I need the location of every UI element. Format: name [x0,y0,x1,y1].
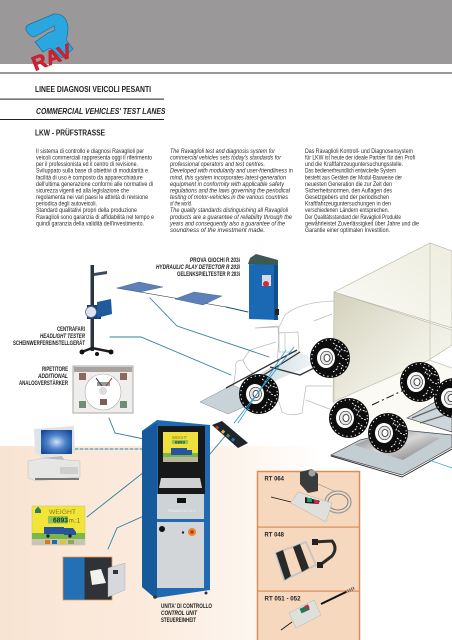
text block: italian: sicurezza vigenti ed alla legislazione che [36,188,130,194]
text block: italian: quindi garanzia della validità dell'investimento. [36,220,144,227]
text block: italian: Standard qualitativi propri della produzione [36,207,138,214]
header band [0,0,452,74]
text block: german: Gesetzgebers und der periodischen [305,194,389,201]
text block: english: regulations and the laws governing the periodical [170,188,291,194]
icon: pc monitor and desktop [28,426,80,481]
text block: german: besteht aus Geräten der Modul-Bauweise der [305,174,402,181]
text block: english: years and consequently also a guarantee of the [169,220,286,227]
icon: analog repeater [73,366,133,413]
text block: german: und die Kraftfahrzeuguntersuchungsstelle. [305,161,403,168]
truck box side [333,292,452,402]
text block: english: The Ravaglioli test and diagnosis system for [170,148,276,155]
label: control unit [161,603,212,624]
logo [26,14,76,76]
front plate [200,385,264,414]
title: english: COMMERCIAL VEHICLES' TEST LANES [36,106,166,116]
text block: italian: periodica degli autoveicoli. [36,201,97,208]
text block: italian: regolamenta nei vari paesi le attività di revisione [36,194,149,201]
tyre rear back [400,362,440,402]
icon: play detector control unit [248,254,279,320]
text block: italian: Sviluppato sulla base di obiettivi di modularità e [36,168,149,175]
icon: control cabinet: RAVAGLIOLI [168,508,195,513]
tyre front left [239,374,279,414]
icon: play detector plates [117,282,222,305]
text block: italian: per il professionista ed il centro di revisione. [36,161,138,168]
icon: control cabinet: WEIGHT [172,435,187,440]
text block: english [169,148,294,234]
icon: RT 048 device [276,539,335,580]
label: RT 064: RT 064 [264,476,284,482]
plate under cab [243,351,318,384]
text block: german: Sicherheitsnormen, den Auflagen des [305,188,392,194]
text block: english: soundness of the investment made. [170,227,265,234]
truck box roof [334,243,452,328]
text block: english: of the world. [170,201,192,208]
rear ramp rollers [354,428,440,460]
text block: german: Der Qualitätsstandard der Ravaglioli Produkte [305,214,401,221]
text block: english: commercial vehicles sets today's standards for [170,155,282,162]
peach background panel [0,446,320,640]
text block: italian: dell'ultima generazione conformi alle normative di [36,181,153,188]
label: play detector: HYDRAULIC PLAY DETECTOR R 203i [156,264,240,271]
label: repeater: ANALOGVERSTÄRKER [19,379,68,387]
label: repeater: ADDITIONAL [37,373,68,380]
icon: remote control [212,421,248,448]
connection lines [75,288,452,549]
text block: german: für LKW ist heute der ideale Partner für den Profi [305,155,415,162]
tyre rear far [434,378,452,418]
rear ramp plate [331,430,452,475]
text block: german: neuesten Generation die zur Zeit den [305,181,392,188]
tyre rear left [329,398,369,438]
dashed rear axle [372,389,406,405]
text block: italian: veicoli commerciali rappresenta oggi il riferimento [36,155,153,162]
text block: english: products are a guarantee of reliability through the [169,214,293,221]
label: play detector: GELENKSPIELTESTER R 203i [177,271,240,278]
label: control unit: UNITA' DI CONTROLLO [161,603,212,610]
text block: german: Das bedienerfreundlich entwickelte System [305,168,396,175]
text block: german: Kraftfahrzeuguntersuchungen in den [305,201,391,208]
icon: RT 064 device [271,469,351,522]
text block: italian: facilità di uso è composto da apparecchiature [36,174,143,181]
truck box edges [333,243,452,404]
tyre front right [310,338,350,378]
label: RT 048: RT 048 [264,532,284,538]
text block: italian: Ravaglioli sono garanzia di affidabilità nel tempo e [36,214,155,221]
axle lines [226,350,318,390]
text block: german: gewährleistet Zuverlässigkeit über Jahre und die [305,220,420,227]
text block: italian: Il sistema di controllo e diagnosi Ravaglioli per [36,148,144,155]
icon: weight screen: m.:1 [69,518,81,524]
tyre rear middle [368,413,408,453]
text block: italian [36,148,155,227]
logo: RAV [29,40,76,76]
icon: weight screen: 6893 [53,518,68,524]
icon: control cabinet [142,420,210,599]
truck cab outline [233,301,334,415]
text block: english: professional operators and test centres. [169,161,265,168]
truck illustration [200,243,452,477]
label: control unit: STEUEREINHEIT [161,617,196,624]
label: repeater: RIPETITORE [42,366,68,373]
truck box lower cutaway [333,360,452,430]
label: headlight tester: CENTRAFARI [57,326,85,333]
icon: weight screen [32,506,85,545]
icon: drawer [63,557,125,600]
title: italian: LINEE DIAGNOSI VEICOLI PESANTI [35,84,151,94]
rear plate right [407,402,452,432]
label: repeater [19,366,68,387]
text block: german: verschiedenen Ländern entsprechen. [305,207,389,214]
text block: english: Developed with modularity and user-friendliness in [170,168,294,175]
text block: english: testing of motor-vehicles in the various countries [170,194,288,201]
icon: RT 051-052 device [281,588,354,630]
label: RT 051-052: RT 051 - 052 [264,596,301,602]
text block: german: Garantie einer optimalen Investition. [305,227,390,234]
label: play detector: PROVA GIOCHI R 203i [190,257,240,264]
label: control unit: CONTROL UNIT [161,610,198,617]
panel: RT accessories [257,469,360,640]
text block: german: Das Ravaglioli Kontroll- und Diagnosensystem [305,148,413,155]
text block: english: mind, this system incorporates latest-generation [170,174,287,181]
title: german: LKW - PRÜFSTRASSE [35,128,105,138]
label: headlight tester: HEADLIGHT TESTER [40,333,85,340]
text block: english: The quality standards distinguishing all Ravaglioli [170,207,289,214]
rear ramp plate edge [331,449,452,477]
icon: headlight tester [80,265,114,356]
text block: english: equipment in conformity with applicable safety [170,181,285,188]
label: play detector [156,257,240,278]
text block: german [305,148,420,234]
icon: weight screen: WEIGHT [49,509,76,516]
label: headlight tester [13,326,85,347]
label: headlight tester: SCHEINWERFEREINSTELLGERÄT [13,339,85,347]
icon: control cabinet: 6893 [175,440,186,445]
